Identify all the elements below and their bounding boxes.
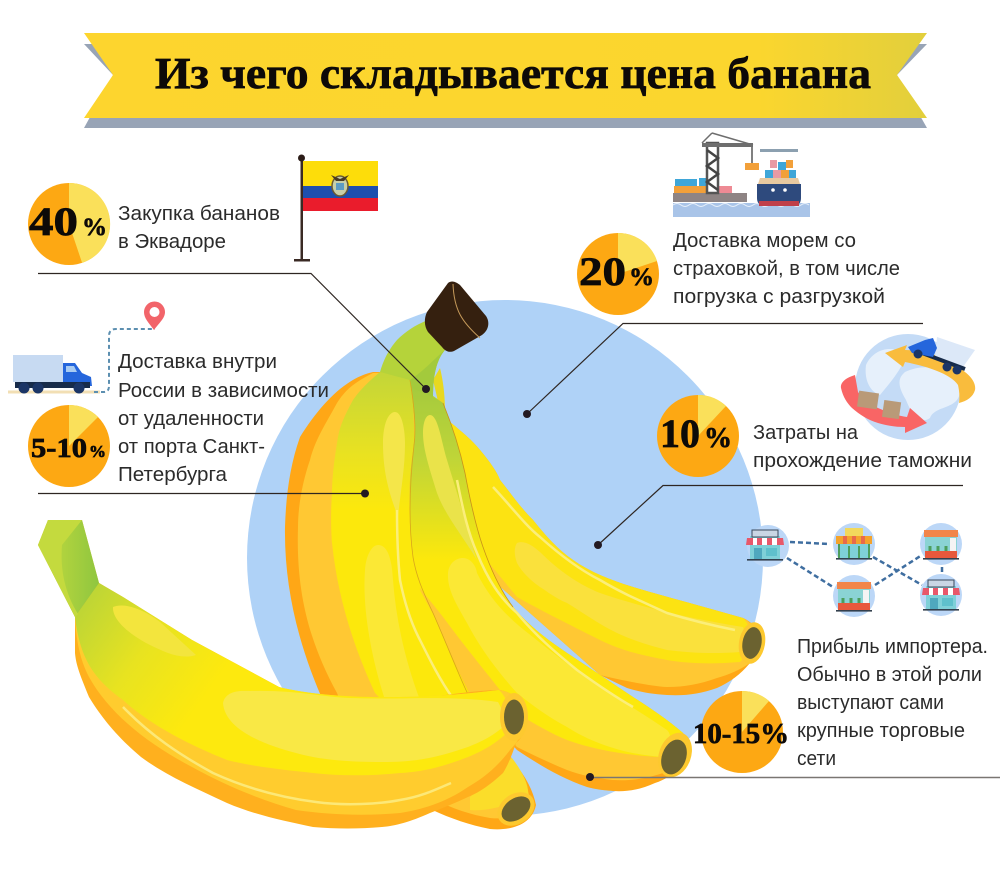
sliver beside stem [433,368,451,424]
callout: 40% [28,183,280,265]
label: Доставка морем со [673,230,856,252]
label: погрузка с разгрузкой [673,286,885,308]
lower end [470,758,528,810]
icon: Ecuador flag [294,154,378,262]
line to banana left [38,490,369,498]
icon: store network [746,523,962,617]
label: прохождение таможни [753,450,972,472]
label: выступают сами [797,692,944,714]
highlight upper [383,412,405,517]
value 40%: 40 [29,199,78,244]
value 20% [579,249,654,294]
highlight upper [423,415,477,560]
icon: port with ship [673,133,810,217]
line to middle banana [586,773,1000,781]
tip [491,785,541,833]
background circle [247,300,763,816]
value 20%: 20 [579,249,626,294]
callout: 20% [577,230,900,315]
banana stem [38,520,99,617]
title ribbon [84,33,927,128]
banana tip [736,620,768,666]
highlight lower [364,545,420,700]
label: России в зависимости [118,380,329,402]
label: крупные торговые [797,720,965,742]
pie 5-10% [28,405,110,487]
banana: front [38,520,528,828]
banana: left back [285,372,541,833]
label: Обычно в этой роли [797,664,982,686]
icon: truck with route [8,302,165,394]
value 40%: % [82,214,107,241]
tip [652,728,698,782]
label: Петербурга [118,464,228,486]
label: Доставка внутри [118,351,277,373]
title: Из чего складывается цена банана [155,49,871,98]
tip [500,693,528,741]
value 10%: 10 [660,411,700,456]
icon: globe with logistics arrows [841,334,975,440]
value 5-10%: % [89,442,106,461]
label: в Эквадоре [118,231,226,253]
seams [410,380,468,694]
banana highlight [223,691,504,762]
pie 10-15% [701,691,783,773]
pie 40% [28,183,110,265]
stem cap [425,282,488,352]
highlight lower [448,558,670,757]
line to left banana [38,274,430,393]
label: Закупка бананов [118,203,280,225]
value 10% [660,411,732,456]
value 10-15%: 10-15% [693,719,789,750]
label: от порта Санкт- [118,436,265,458]
line to blue circle [523,324,923,418]
banana: middle [410,380,698,791]
callout: 10-15% [693,636,988,773]
value 40% [29,199,107,244]
label: от удаленности [118,408,264,430]
label: Прибыль импортера. [797,636,988,658]
value 5-10% [31,433,106,463]
value 10%: % [704,423,732,454]
pie 20% [577,233,659,315]
callout: 10% [657,395,972,477]
label: сети [797,748,836,770]
pale stripe [493,487,735,630]
pie 10% [657,395,739,477]
value 5-10%: 5-10 [31,433,87,463]
callout: 5-10% [8,302,329,487]
label: страховкой, в том числе [673,258,900,280]
banana stem with cap [380,282,488,403]
value 20%: % [629,264,654,291]
banana: right [433,368,768,695]
label: Затраты на [753,422,859,444]
line to right banana [594,486,963,549]
pale stripe [123,707,451,804]
